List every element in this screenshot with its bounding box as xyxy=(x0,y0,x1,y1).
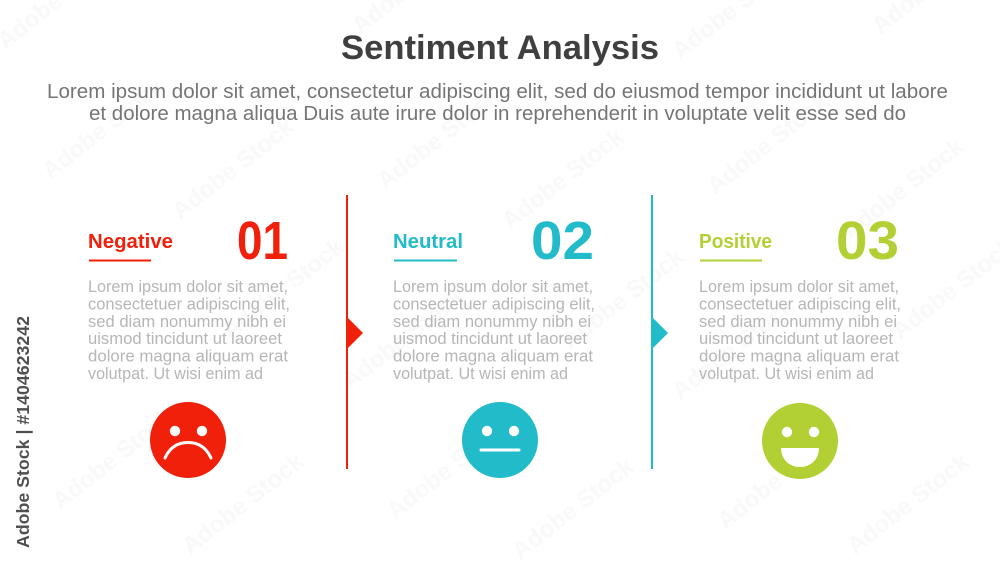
title: Sentiment Analysis xyxy=(341,29,659,67)
text block: positive: Lorem ipsum dolor sit amet, xyxy=(699,278,899,296)
icon: sad face xyxy=(150,402,226,478)
watermark pattern: Adobe Stock xyxy=(217,233,350,345)
watermark pattern: Adobe Stock xyxy=(177,448,310,560)
text block: neutral: uismod tincidunt ut laoreet xyxy=(393,330,587,348)
watermark pattern: Adobe Stock xyxy=(337,283,470,395)
watermark pattern: Adobe Stock xyxy=(167,113,300,225)
icon: happy face xyxy=(762,403,838,479)
panel: neutral xyxy=(393,211,595,478)
underline: neutral xyxy=(394,260,457,262)
watermark pattern: Adobe Stock xyxy=(47,403,180,515)
text block: negative: volutpat. Ut wisi enim ad xyxy=(88,365,263,383)
stock id label: Adobe Stock | #1404623242 xyxy=(13,316,33,548)
subtitle: Lorem ipsum dolor sit amet, consectetur adipiscing elit, sed do eiusmod tempor incididunt ut labore xyxy=(47,81,948,103)
watermark pattern: Adobe Stock xyxy=(382,413,515,525)
text block: neutral: sed diam nonummy nibh ei xyxy=(393,313,591,331)
underline: negative xyxy=(89,260,151,262)
watermark pattern: Adobe Stock xyxy=(702,88,835,200)
text block: neutral xyxy=(393,278,595,383)
number 03: 03 xyxy=(836,211,899,271)
text block: positive: volutpat. Ut wisi enim ad xyxy=(699,365,874,383)
panel: negative xyxy=(88,211,290,478)
text block: positive: uismod tincidunt ut laoreet xyxy=(699,330,893,348)
watermark pattern: Adobe Stock xyxy=(372,83,505,195)
text block: neutral: consectetuer adipiscing elit, xyxy=(393,296,595,314)
watermark pattern: Adobe Stock xyxy=(842,448,975,560)
watermark pattern: Adobe Stock xyxy=(667,293,800,405)
number 01: 01 xyxy=(237,211,288,271)
text block: negative xyxy=(88,278,290,383)
watermark pattern: Adobe Stock xyxy=(507,453,640,563)
text block: negative: Lorem ipsum dolor sit amet, xyxy=(88,278,288,296)
text block: neutral: volutpat. Ut wisi enim ad xyxy=(393,365,568,383)
text block: neutral: Lorem ipsum dolor sit amet, xyxy=(393,278,593,296)
text block: negative: consectetuer adipiscing elit, xyxy=(88,296,290,314)
heading: neutral: Neutral xyxy=(393,231,463,253)
subtitle: et dolore magna aliqua Duis aute irure dolor in reprehenderit in voluptate velit esse sed do xyxy=(89,103,906,125)
text block: positive xyxy=(699,278,901,383)
heading: positive: Positive xyxy=(699,231,772,253)
divider arrow: red xyxy=(346,195,363,469)
text block: positive: dolore magna aliquam erat xyxy=(699,348,899,366)
subtitle xyxy=(47,81,948,125)
watermark pattern: Adobe Stock xyxy=(497,123,630,235)
heading: negative: Negative xyxy=(88,231,173,253)
text block: positive: sed diam nonummy nibh ei xyxy=(699,313,897,331)
text block: positive: consectetuer adipiscing elit, xyxy=(699,296,901,314)
text block: negative: dolore magna aliquam erat xyxy=(88,348,288,366)
watermark pattern: Adobe Stock xyxy=(37,73,170,185)
text block: negative: uismod tincidunt ut laoreet xyxy=(88,330,282,348)
icon: neutral face xyxy=(462,402,538,478)
text block: negative: sed diam nonummy nibh ei xyxy=(88,313,286,331)
text block: neutral: dolore magna aliquam erat xyxy=(393,348,593,366)
number 02: 02 xyxy=(531,211,594,271)
panel: positive xyxy=(699,211,901,479)
watermark pattern: Adobe Stock xyxy=(557,243,690,355)
divider arrow: teal xyxy=(651,195,668,469)
watermark pattern: Adobe Stock xyxy=(712,423,845,535)
watermark pattern: Adobe Stock xyxy=(837,133,970,245)
underline: positive xyxy=(700,260,762,262)
